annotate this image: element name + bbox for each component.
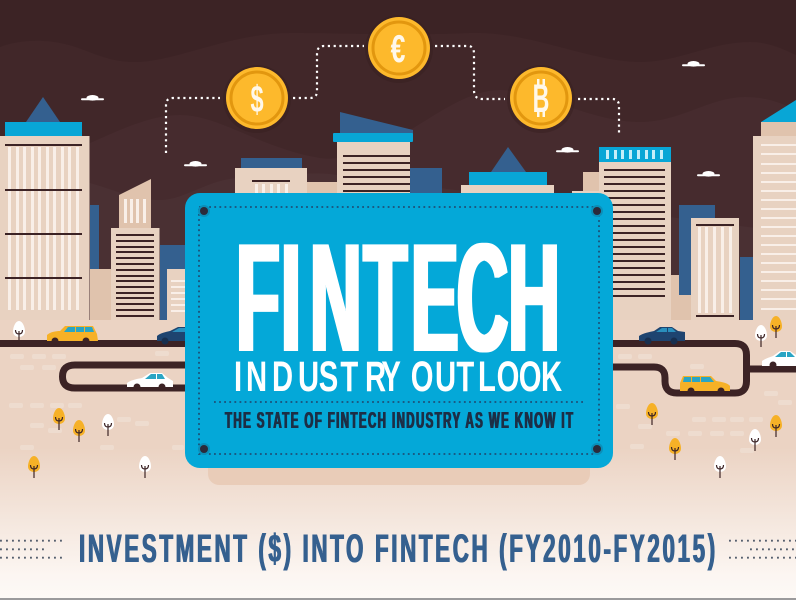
- coin: bitcoin: B: [533, 75, 549, 121]
- sky wave middle: [0, 90, 796, 340]
- clouds: [81, 61, 720, 177]
- dotted connector lines: [166, 46, 619, 153]
- small building: [167, 269, 187, 320]
- sky wave front: [0, 160, 796, 340]
- panel shadow: [208, 440, 590, 485]
- sky background: [0, 0, 796, 340]
- coin: dollar: [223, 65, 291, 133]
- title: FINTECH: [236, 211, 560, 384]
- building 8: [753, 100, 796, 320]
- building 1: [0, 97, 90, 320]
- section heading: INVESTMENT ($) INTO FINTECH (FY2010-FY2015): [79, 526, 715, 571]
- coin: euro: €: [391, 28, 405, 71]
- building 7: [691, 218, 739, 320]
- panel rivets: [198, 205, 603, 455]
- car: yellow wagon right: [680, 376, 730, 394]
- building 2: [111, 179, 160, 320]
- subtitle: INDUSTRY OUTLOOK: [234, 352, 562, 400]
- panel dotted border: [199, 207, 599, 454]
- heading dots left: [0, 541, 64, 558]
- trees: [13, 316, 782, 478]
- coin: euro: [365, 15, 433, 83]
- car: blue right: [639, 327, 685, 344]
- ground: [0, 320, 796, 598]
- roads: [0, 344, 796, 393]
- car: white right: [762, 351, 796, 368]
- bottom edge line: [0, 598, 796, 600]
- car: yellow wagon left: [47, 326, 98, 344]
- car: white left: [127, 373, 173, 390]
- dotted divider: [214, 401, 584, 403]
- building 6: [599, 147, 671, 320]
- sky wave back: [0, 33, 796, 340]
- skyline right: [572, 100, 796, 320]
- coin: bitcoin: [507, 65, 575, 133]
- heading dots right: [729, 541, 796, 558]
- tagline: THE STATE OF FINTECH INDUSTRY AS WE KNOW IT: [225, 408, 573, 433]
- car: blue left: [157, 327, 190, 344]
- coin: dollar: $: [250, 77, 264, 120]
- skyline centre: [235, 112, 554, 196]
- ground bricks: [9, 351, 792, 453]
- skyline left: [0, 97, 190, 320]
- main title panel: [185, 193, 613, 468]
